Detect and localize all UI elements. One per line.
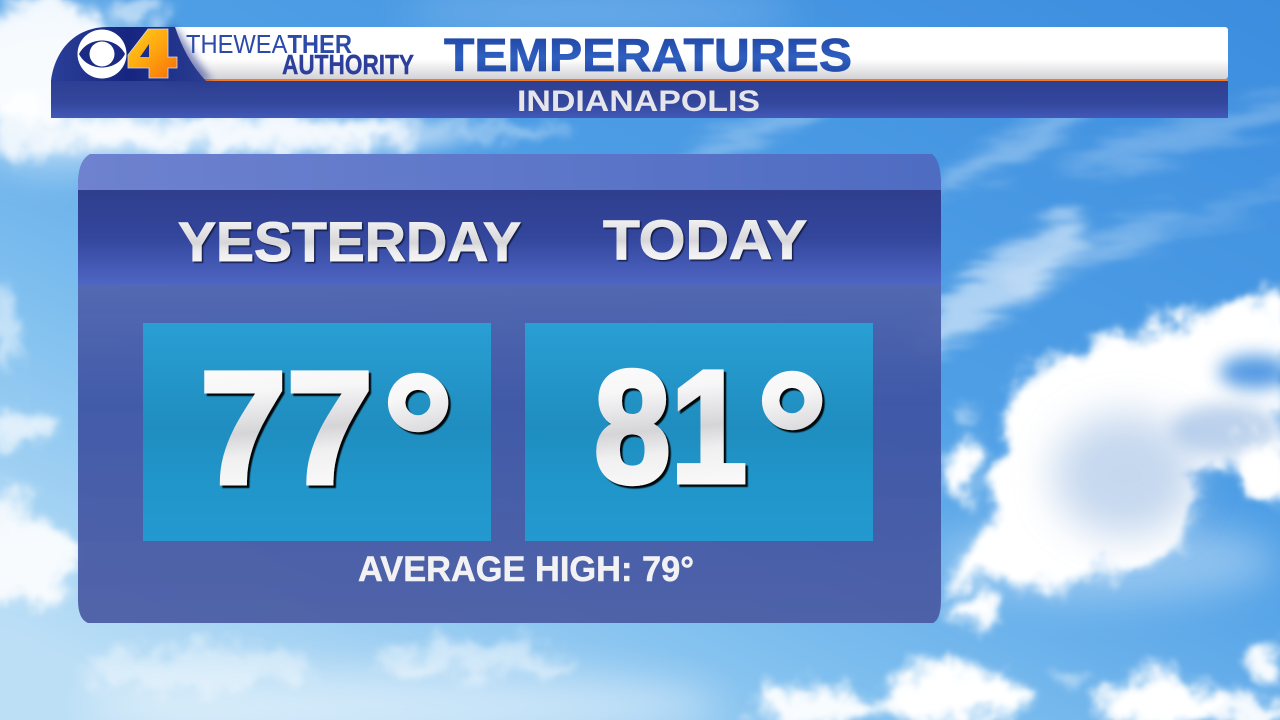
orange rule: [200, 79, 1228, 82]
value: 81 degrees: °: [756, 336, 828, 537]
value: 77 degrees: 77: [200, 338, 373, 517]
value: 81 degrees: 81: [594, 337, 747, 516]
icon: channel number 4: [128, 29, 177, 78]
value: 77 degrees: °: [382, 338, 454, 539]
logo dome: [51, 27, 212, 81]
panel heading band: [78, 190, 941, 285]
header banner: [51, 27, 1228, 118]
title: TEMPERATURES: [444, 29, 852, 81]
wispy high clouds: [673, 81, 1280, 370]
card: yesterday temperature: [143, 323, 491, 541]
white title bar: [150, 27, 1228, 79]
blue location bar: [51, 81, 1228, 118]
bottom clouds: [80, 644, 1280, 720]
left edge clouds: [0, 283, 74, 606]
value: 81 degrees: [594, 336, 828, 537]
panel top band: [78, 154, 941, 190]
card: today temperature: [525, 323, 873, 541]
heading: today: TODAY: [603, 208, 807, 271]
panel: temperatures: [78, 154, 941, 623]
brand wordmark: [186, 29, 414, 80]
brand wordmark: THEWEATHER: [186, 29, 352, 59]
large right cumulus cloud: [940, 295, 1280, 624]
panel body: [78, 285, 941, 623]
brand wordmark: AUTHORITY: [282, 49, 414, 80]
value: 77 degrees: [200, 338, 454, 539]
heading: yesterday: YESTERDAY: [178, 210, 521, 273]
top left cloud: [0, 0, 570, 170]
location label: INDIANAPOLIS: [517, 85, 760, 118]
icon: CBS eye logo: [78, 30, 126, 78]
average high note: AVERAGE HIGH: 79°: [358, 550, 694, 589]
